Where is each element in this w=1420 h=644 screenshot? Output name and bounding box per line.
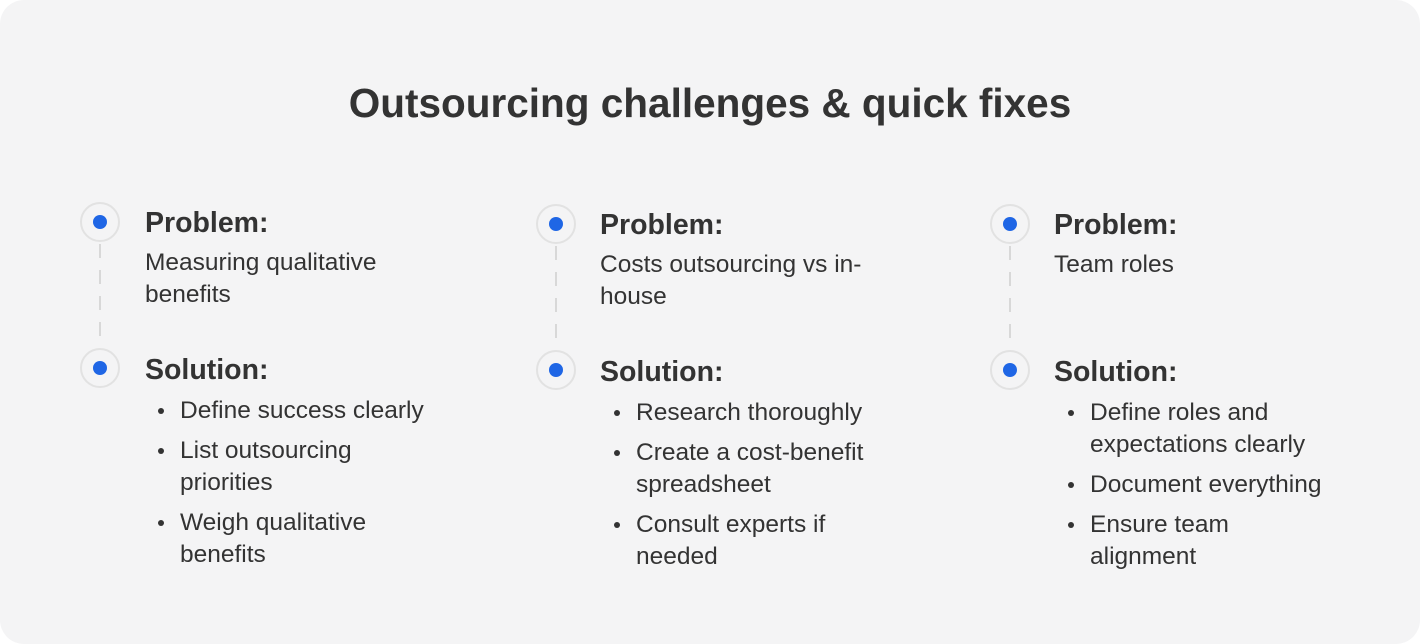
text: problem 2: house: [600, 283, 667, 310]
bullets 1: priorities: [180, 469, 273, 496]
bullets 2: needed: [636, 543, 718, 570]
bullets 1: Weigh qualitative: [180, 509, 366, 536]
bullets 1: Define success clearly: [180, 397, 424, 424]
bullets 2: Create a cost-benefit: [636, 439, 863, 466]
icon: solution dot 3: [990, 350, 1030, 390]
bullets 3: Document everything: [1090, 471, 1322, 498]
bullets 3: Ensure team: [1090, 511, 1229, 538]
text: problem 2: [600, 251, 861, 310]
panel: column 1: [80, 202, 424, 568]
icon: problem dot 1: [80, 202, 120, 242]
title: Outsourcing challenges & quick fixes: [349, 80, 1071, 126]
icon: solution dot 1: [80, 348, 120, 388]
bullets 2: Consult experts if: [636, 511, 825, 538]
text: problem 1: [145, 249, 377, 308]
text: problem 2: Costs outsourcing vs in-: [600, 251, 861, 278]
heading: problem 3: Problem:: [1054, 209, 1178, 241]
bullets 3: alignment: [1090, 543, 1196, 570]
icon: problem dot 2: [536, 204, 576, 244]
text: problem 1: benefits: [145, 281, 231, 308]
icon: solution dot 2: [536, 350, 576, 390]
heading: solution 3: Solution:: [1054, 356, 1177, 388]
bullets 1: [158, 397, 424, 568]
heading: solution 2: Solution:: [600, 356, 723, 388]
bullets 1: List outsourcing: [180, 437, 352, 464]
connector line 1: [99, 244, 101, 348]
panel: column 2: [536, 204, 864, 570]
bullets 3: [1068, 399, 1322, 570]
bullets 3: expectations clearly: [1090, 431, 1305, 458]
connector line 2: [555, 246, 557, 350]
heading: problem 2: Problem:: [600, 209, 724, 241]
heading: problem 1: Problem:: [145, 207, 269, 239]
bullets 3: Define roles and: [1090, 399, 1268, 426]
text: problem 1: Measuring qualitative: [145, 249, 377, 276]
icon: problem dot 3: [990, 204, 1030, 244]
text: problem 3: Team roles: [1054, 251, 1174, 278]
connector line 3: [1009, 246, 1011, 350]
bullets 1: benefits: [180, 541, 266, 568]
heading: solution 1: Solution:: [145, 354, 268, 386]
bullets 2: Research thoroughly: [636, 399, 862, 426]
bullets 2: [614, 399, 864, 570]
bullets 2: spreadsheet: [636, 471, 771, 498]
